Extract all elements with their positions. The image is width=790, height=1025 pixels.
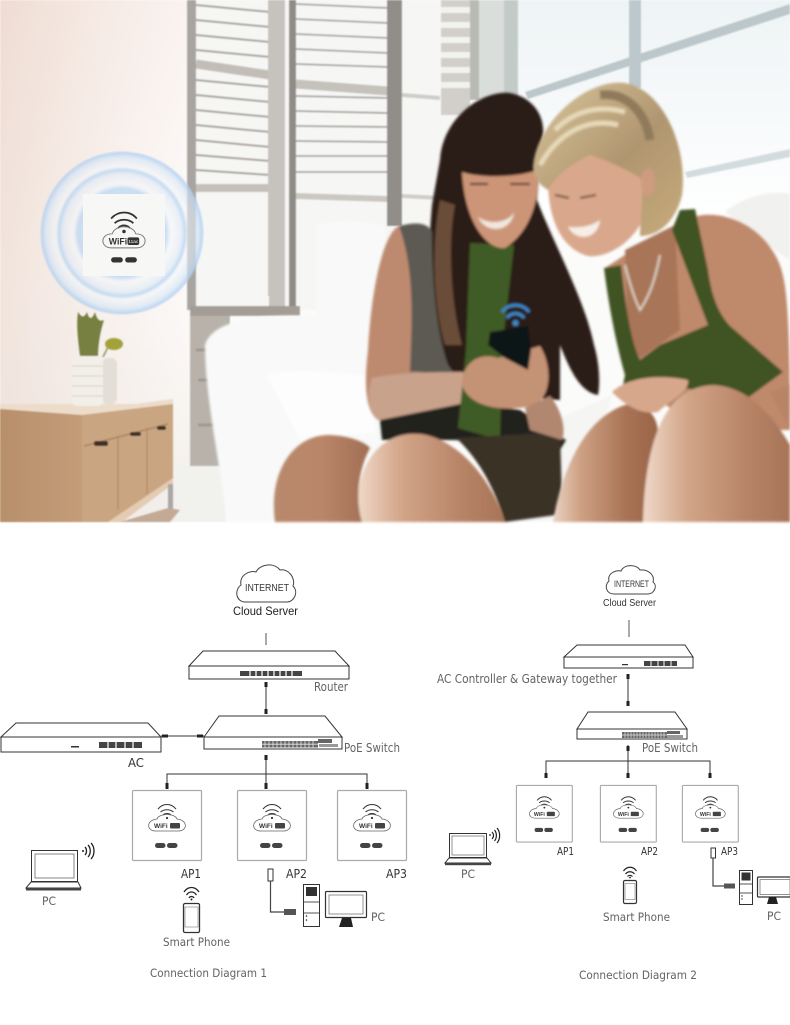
access point AP1 [132,790,202,860]
icon: PoE switch [204,716,342,749]
icon: internet cloud: INTERNET [614,579,649,589]
caption: connection diagram 1: Connection Diagram 1 [150,966,267,980]
label: AC controller and gateway: AC Controller & Gateway together [437,672,617,686]
woman left [274,93,599,522]
label: AP1: AP1 [181,867,201,881]
access point AP1 [516,785,572,842]
icon: wall access point [83,194,165,276]
icon: desktop monitor [758,877,790,904]
arrow: AC to switch [161,734,204,738]
label: desktop PC: PC [371,910,385,924]
icon: PoE switch [577,712,687,739]
label: smart phone: Smart Phone [603,910,670,924]
icon: desktop monitor [326,892,366,927]
icon: AC controller [1,723,161,752]
icon: laptop with wifi [445,828,500,865]
label: laptop PC: PC [461,867,475,881]
icon: cable from AP2 to PC [268,869,296,915]
access point AP3 [338,790,406,860]
sofa [205,193,790,522]
icon: internet cloud [606,566,655,594]
arrows: switch to access points [166,755,368,789]
label: PoE switch: PoE Switch [344,741,400,755]
icon: wall access point: WiFi [109,236,127,246]
access point AP3: WiFi [700,812,711,818]
woman right [533,83,790,522]
access point AP3 [682,785,738,842]
frame below window [190,306,230,466]
icon: smart phone with wifi [624,867,636,904]
label: AP3: AP3 [721,846,738,858]
caption: connection diagram 2: Connection Diagram 2 [579,968,697,982]
icon: internet cloud [237,565,296,602]
label: desktop PC: PC [767,909,781,923]
label: PoE switch: PoE Switch [642,741,698,755]
access point AP2 [238,790,306,860]
icon: AC controller and gateway [564,645,693,668]
icon: cable from AP3 to PC [711,848,735,888]
room background [0,0,790,522]
icon: laptop with wifi [26,843,94,890]
access point AP1: WiFi [534,812,545,818]
access point AP2: WiFi [259,823,273,830]
icon: smart phone with wifi [184,888,200,932]
label: AC: AC [128,756,144,770]
label: router: Router [314,680,348,694]
arrow: router to switch [264,682,268,714]
icon: desktop tower [304,884,320,926]
label: smart phone: Smart Phone [163,935,230,949]
icon: wall access point: 11ac [128,239,139,244]
access point AP1: WiFi [154,823,168,830]
label: AP3: AP3 [386,867,407,881]
arrow: controller to switch [626,674,630,706]
panel: connection diagram 1 [1,565,407,980]
sideboard and plant [0,312,180,522]
access point AP2 [600,785,656,842]
label: AP2: AP2 [641,846,658,858]
icon: desktop tower [740,870,752,904]
label: cloud server: Cloud Server [233,604,298,618]
label: cloud server: Cloud Server [603,598,657,609]
access point AP2: WiFi [618,812,629,818]
icon: router [189,651,349,679]
access point AP3: WiFi [359,823,373,830]
hero photo: two women using a phone on a sofa [0,0,790,522]
label: laptop PC: PC [42,894,56,908]
label: AP1: AP1 [557,846,574,858]
label: AP2: AP2 [286,867,307,881]
wifi range rings [40,151,204,315]
icon: internet cloud: INTERNET [245,583,289,594]
panel: connection diagram 2 [437,566,790,982]
arrows: switch to access points [544,745,712,778]
